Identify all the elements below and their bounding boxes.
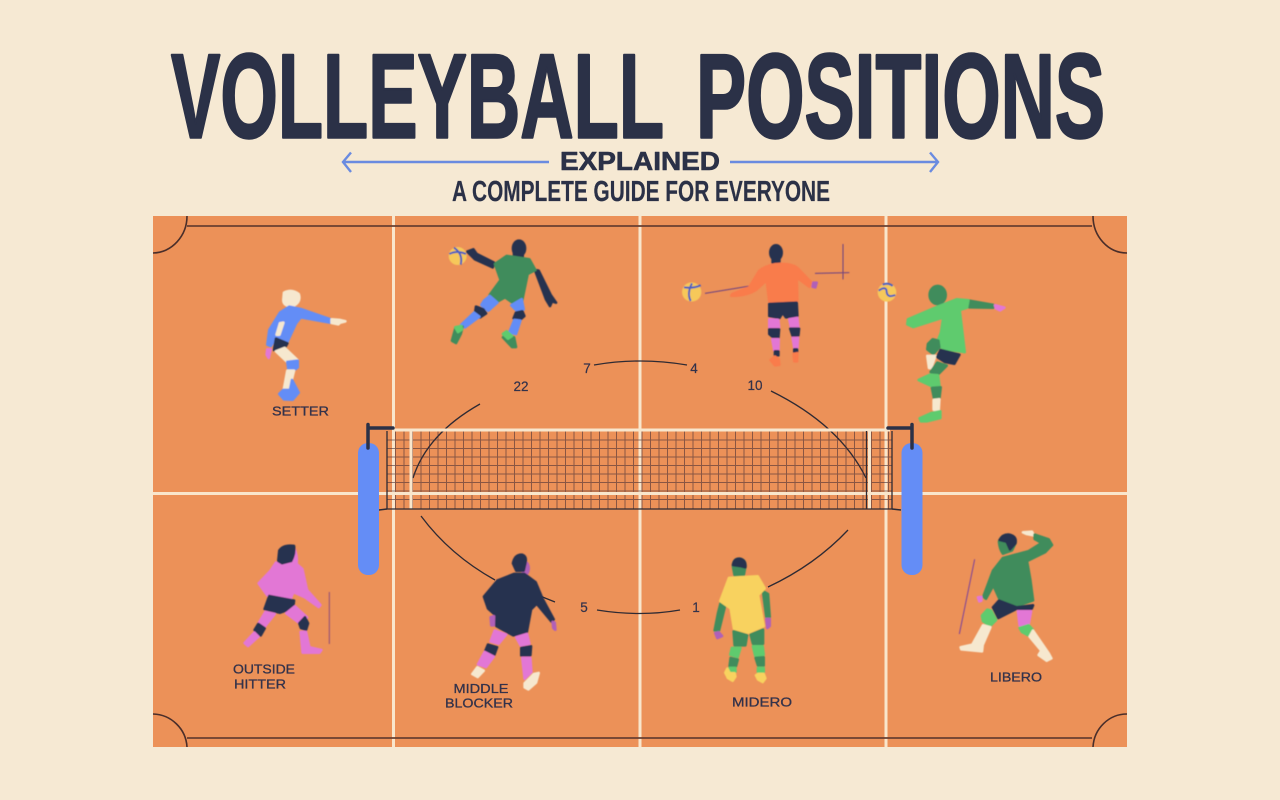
right arrow [730,152,938,172]
volleyball [449,247,467,265]
player: setter [267,291,345,400]
jersey numbers: 5 [580,600,588,615]
title block [171,30,1105,208]
text: middle blocker label [445,681,513,710]
heading: explained: EXPLAINED [560,146,720,176]
player: orange player [682,244,849,365]
text: outside hitter label: OUTSIDE [233,662,295,676]
text: middle blocker label: BLOCKER [445,696,513,710]
volleyball court [153,216,1127,747]
jersey numbers: 22 [513,379,529,394]
text: midero label: MIDERO [732,694,792,710]
court arcs [413,361,866,614]
jersey numbers: 4 [690,361,698,376]
text: outside hitter label [233,662,295,692]
jersey numbers: 7 [583,361,591,376]
jersey numbers [513,361,763,615]
player: hitter with ball [449,241,556,347]
subtitle: A COMPLETE GUIDE FOR EVERYONE [452,176,830,208]
volleyball [878,283,896,302]
text: middle blocker label: MIDDLE [454,681,509,696]
player: green player [878,283,1004,421]
text: outside hitter label: HITTER [234,676,286,692]
player: middle blocker [472,555,555,689]
jersey numbers: 10 [747,378,763,393]
right net pole [888,424,922,575]
player: outside hitter [245,546,329,653]
left arrow [343,152,549,172]
left net pole [358,424,393,575]
text: setter label: SETTER [272,404,329,418]
text: libero label: LIBERO [990,670,1042,684]
player: libero [959,532,1052,661]
player: midero [715,559,770,682]
jersey numbers: 1 [692,600,700,615]
net [379,430,901,510]
volleyball [682,282,701,302]
title: volleyball positions: VOLLEYBALL [171,30,664,164]
